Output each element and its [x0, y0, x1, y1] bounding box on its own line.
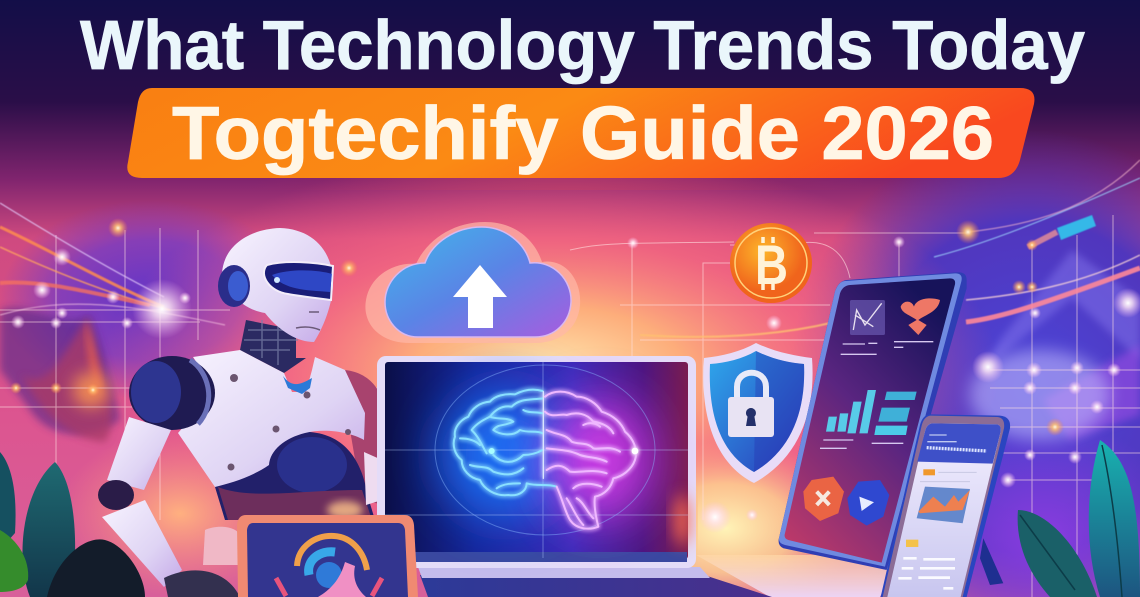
caption lines	[841, 342, 933, 354]
light streaks right	[640, 160, 1140, 337]
robot elbow	[98, 480, 134, 510]
pale desk surface	[696, 555, 900, 597]
subtitle banner: Togtechify Guide 2026	[172, 91, 994, 175]
robot forearm	[102, 500, 182, 587]
lock	[728, 373, 774, 437]
robot rear arm	[345, 370, 384, 505]
icon: bitcoin coin: B	[755, 233, 788, 296]
robot upper arm	[107, 417, 171, 490]
right plants	[1018, 440, 1140, 597]
laptop keyboard base	[420, 575, 772, 597]
brain left hemisphere	[454, 390, 557, 495]
robot neck	[240, 320, 306, 373]
laptop screen	[385, 362, 688, 559]
blue badge	[847, 480, 889, 526]
small tablet	[237, 515, 418, 597]
large tablet device	[779, 272, 967, 570]
robot abdomen	[215, 432, 375, 520]
icon: security shield	[703, 343, 813, 483]
robot visor	[264, 262, 333, 300]
brain right hemisphere	[545, 392, 636, 529]
robot head	[222, 228, 333, 342]
robot	[98, 228, 384, 597]
heart tile icon	[901, 298, 940, 335]
robot torso	[178, 350, 365, 487]
circuit grid lines	[0, 215, 1140, 597]
smartphone	[881, 414, 1010, 597]
icon: bitcoin coin	[730, 223, 812, 303]
tablet ring logo	[276, 536, 382, 597]
chart tile icon	[850, 300, 885, 335]
left plants	[0, 452, 145, 597]
bar chart	[826, 390, 917, 435]
icon: upload cloud	[365, 222, 580, 343]
brain	[454, 390, 638, 529]
orange badge	[803, 477, 844, 521]
robot hand	[164, 570, 240, 597]
laptop lid	[377, 356, 696, 568]
heading: What Technology Trends Today	[80, 6, 1085, 84]
phone area chart	[917, 487, 970, 523]
light streaks left	[0, 203, 225, 325]
robot shoulder	[129, 356, 215, 430]
robot thigh	[203, 527, 240, 565]
robot ear	[218, 265, 250, 307]
glowing nodes	[10, 218, 1140, 533]
laptop	[377, 356, 900, 597]
